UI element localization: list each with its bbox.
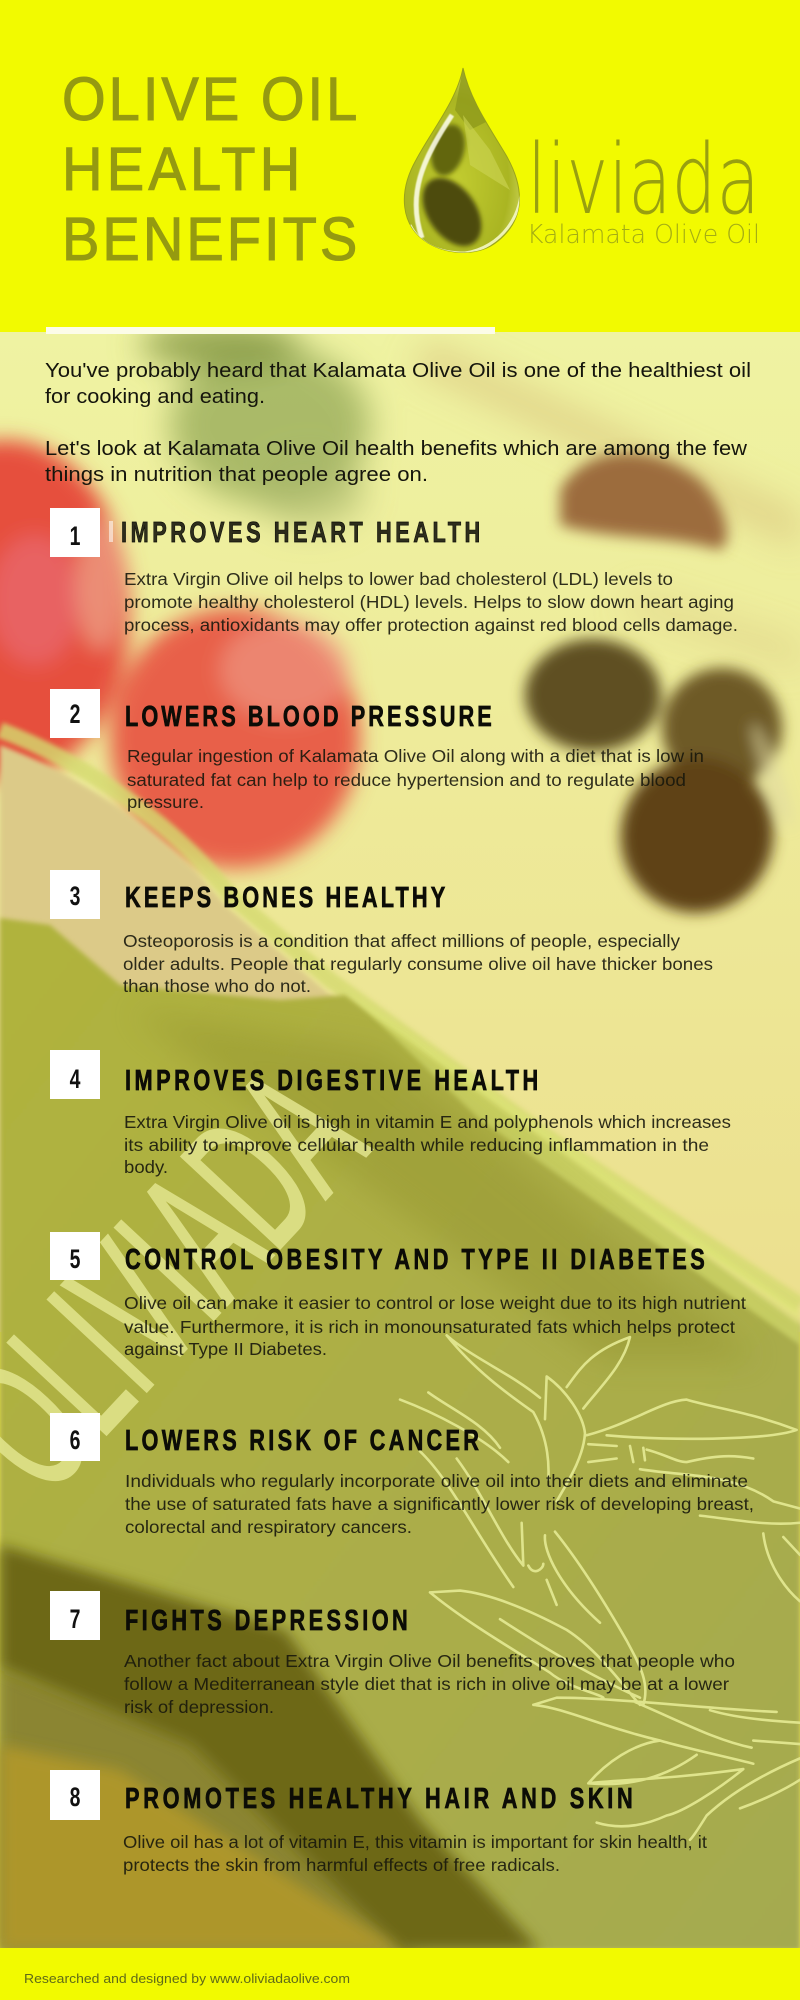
body text 7: Another fact about Extra Virgin Olive Oil benefits proves that people who <box>124 1651 735 1671</box>
faded letter behind heading 1 <box>109 521 113 542</box>
body text 1 <box>124 569 738 635</box>
panel: benefit 7 <box>50 1591 735 1717</box>
number badge 2: 2 <box>70 699 80 729</box>
body text 3: older adults. People that regularly consume olive oil have thicker bones <box>123 954 713 974</box>
number badge 8 <box>50 1770 100 1820</box>
body text 2: saturated fat can help to reduce hypertension and to regulate blood <box>127 770 686 790</box>
heading 2: LOWERS BLOOD PRESSURE <box>125 701 492 733</box>
body text 1: promote healthy cholesterol (HDL) levels. Helps to slow down heart aging <box>124 592 734 612</box>
intro text: Let's look at Kalamata Olive Oil health benefits which are among the few <box>45 438 748 460</box>
body text 5: Olive oil can make it easier to control or lose weight due to its high nutrient <box>124 1293 746 1313</box>
number badge 8: 8 <box>70 1782 80 1812</box>
panel: benefit 8 <box>50 1770 707 1875</box>
body text 3: than those who do not. <box>123 976 311 996</box>
footer band <box>0 1948 800 2000</box>
title: HEALTH <box>62 136 300 204</box>
number badge 3: 3 <box>70 881 80 911</box>
body text 5: value. Furthermore, it is rich in monounsaturated fats which helps protect <box>124 1317 735 1337</box>
body text 8: Olive oil has a lot of vitamin E, this vitamin is important for skin health, it <box>123 1832 707 1852</box>
title <box>62 66 357 274</box>
intro text <box>45 360 751 486</box>
panel: benefit 1 <box>50 508 738 635</box>
panel: benefit 2 <box>50 689 704 812</box>
heading 6: LOWERS RISK OF CANCER <box>125 1425 479 1457</box>
icon: olive oil drop <box>404 68 521 257</box>
heading 4: IMPROVES DIGESTIVE HEALTH <box>125 1065 538 1097</box>
heading 5: CONTROL OBESITY AND TYPE II DIABETES <box>125 1244 705 1276</box>
bottle label leaf drawing <box>400 1335 800 1840</box>
panel: benefit 5 <box>50 1232 746 1359</box>
body text 2 <box>127 746 704 812</box>
panel: benefit 4 <box>50 1050 731 1177</box>
body text 7 <box>124 1651 735 1717</box>
intro text: things in nutrition that people agree on. <box>45 464 428 486</box>
title: BENEFITS <box>62 206 357 274</box>
body text 6: colorectal and respiratory cancers. <box>125 1517 412 1537</box>
heading 7: FIGHTS DEPRESSION <box>125 1605 408 1637</box>
logo: Oliviada Kalamata Olive Oil <box>404 68 760 257</box>
number badge 2 <box>50 689 100 738</box>
body text 2: pressure. <box>127 792 204 812</box>
heading 8: PROMOTES HEALTHY HAIR AND SKIN <box>125 1783 633 1815</box>
white divider bar <box>46 327 495 334</box>
body text 4: its ability to improve cellular health while reducing inflammation in the <box>124 1135 709 1155</box>
number badge 1: 1 <box>70 521 80 551</box>
header band <box>0 0 800 332</box>
intro text: You've probably heard that Kalamata Olive Oil is one of the healthiest oil <box>45 360 751 382</box>
footer credit: Researched and designed by www.oliviadaolive.com <box>24 1971 350 1986</box>
number badge 4 <box>50 1050 100 1099</box>
tagline: Kalamata Olive Oil <box>527 220 760 250</box>
body text 3 <box>123 931 713 996</box>
body text 6: Individuals who regularly incorporate olive oil into their diets and eliminate <box>125 1471 748 1491</box>
panel: benefit 6 <box>50 1413 754 1537</box>
number badge 5: 5 <box>70 1244 80 1274</box>
body text 6 <box>125 1471 754 1537</box>
body text 4: body. <box>124 1157 168 1177</box>
body text 6: the use of saturated fats have a significantly lower risk of developing breast, <box>125 1494 754 1514</box>
body text 1: process, antioxidants may offer protection against red blood cells damage. <box>124 615 738 635</box>
number badge 3 <box>50 870 100 919</box>
number badge 5 <box>50 1232 100 1280</box>
body text 3: Osteoporosis is a condition that affect millions of people, especially <box>123 931 680 951</box>
body text 4: Extra Virgin Olive oil is high in vitamin E and polyphenols which increases <box>124 1112 731 1132</box>
intro text: for cooking and eating. <box>45 386 265 408</box>
panel: benefit 3 <box>50 870 713 996</box>
number badge 4: 4 <box>70 1064 80 1094</box>
body text 8 <box>123 1832 707 1875</box>
body text 5: against Type II Diabetes. <box>124 1339 327 1359</box>
body text 1: Extra Virgin Olive oil helps to lower bad cholesterol (LDL) levels to <box>124 569 673 589</box>
body text 5 <box>124 1293 746 1359</box>
number badge 7 <box>50 1591 100 1640</box>
number badge 6 <box>50 1413 100 1461</box>
number badge 7: 7 <box>70 1604 80 1634</box>
body text 7: follow a Mediterranean style diet that is rich in olive oil may be at a lower <box>124 1674 729 1694</box>
title: OLIVE OIL <box>62 66 357 134</box>
body text 7: risk of depression. <box>124 1697 274 1717</box>
body text 2: Regular ingestion of Kalamata Olive Oil along with a diet that is low in <box>127 746 704 766</box>
heading 1: IMPROVES HEART HEALTH <box>121 517 480 549</box>
body text 4 <box>124 1112 731 1177</box>
body text 8: protects the skin from harmful effects of free radicals. <box>123 1855 560 1875</box>
number badge 1 <box>50 508 100 557</box>
heading 3: KEEPS BONES HEALTHY <box>125 882 445 914</box>
number badge 6: 6 <box>70 1425 80 1455</box>
